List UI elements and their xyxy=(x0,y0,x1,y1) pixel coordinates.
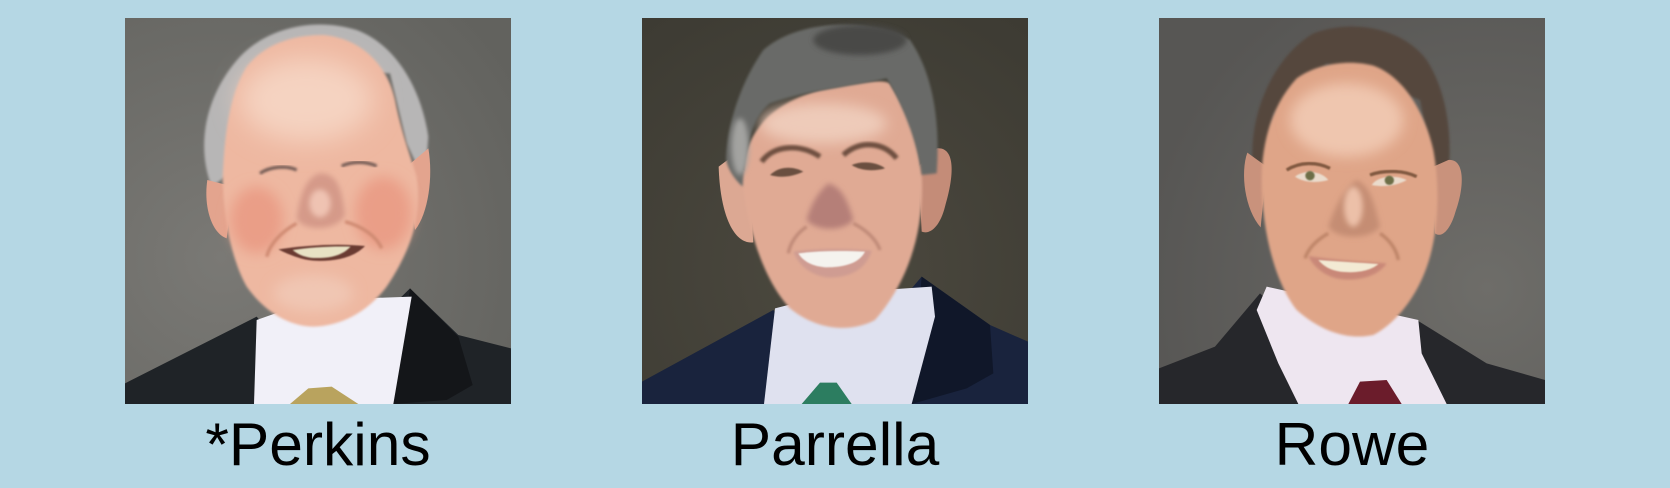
right ear xyxy=(407,148,430,230)
teeth xyxy=(798,251,865,267)
left iris xyxy=(1305,171,1315,180)
face xyxy=(743,81,922,328)
face xyxy=(223,35,418,327)
right ear xyxy=(918,148,952,232)
left eye xyxy=(260,167,297,173)
photo: Perkins portrait xyxy=(125,18,511,404)
left eyebrow xyxy=(1287,164,1330,170)
mouth lips xyxy=(793,249,872,277)
maroon tie xyxy=(1348,380,1402,404)
face xyxy=(1262,63,1437,337)
forehead highlight xyxy=(760,103,887,143)
nose highlight xyxy=(1344,187,1363,227)
nose shadow xyxy=(807,183,853,229)
left ear xyxy=(1244,153,1267,227)
right cheek xyxy=(355,177,412,250)
gold tie xyxy=(290,387,358,404)
right eyebrow xyxy=(1370,171,1417,177)
left ear xyxy=(719,159,753,242)
suit lapel shade xyxy=(393,288,473,404)
panel: Perkins portrait and name xyxy=(125,18,511,478)
name: Rowe: Rowe xyxy=(1275,410,1429,478)
right eyebrow xyxy=(843,145,897,158)
grey hair xyxy=(726,25,938,187)
left ear xyxy=(206,180,233,238)
photo: Parrella portrait xyxy=(642,18,1028,404)
photo: Rowe portrait xyxy=(1159,18,1545,404)
white shirt collar xyxy=(254,297,412,404)
right ear xyxy=(1433,160,1462,235)
green tie xyxy=(802,383,852,404)
left eye xyxy=(770,168,803,177)
photo background xyxy=(1159,18,1545,404)
smile folds xyxy=(267,222,382,257)
smile folds xyxy=(788,223,880,253)
forehead highlight xyxy=(240,58,373,142)
name: Parrella: Parrella xyxy=(731,410,939,478)
right eye xyxy=(342,162,377,166)
teeth xyxy=(293,246,351,258)
navy suit xyxy=(642,277,1028,404)
left cheek xyxy=(230,187,283,253)
right eye xyxy=(852,162,885,170)
nose shadow xyxy=(297,173,345,228)
panel: Rowe portrait and name xyxy=(1159,18,1545,478)
photo background xyxy=(125,18,511,404)
nose highlight xyxy=(309,189,331,217)
mouth lips xyxy=(1308,256,1387,280)
forehead highlight xyxy=(1290,83,1403,157)
white shirt collar xyxy=(764,287,935,404)
suit lapel shade xyxy=(912,277,993,404)
hair shadow on top xyxy=(813,25,907,55)
nose shadow xyxy=(1328,180,1380,237)
left eye xyxy=(1295,172,1328,182)
right iris xyxy=(1385,176,1394,185)
smile folds xyxy=(1305,233,1398,260)
dark suit xyxy=(1159,293,1545,404)
photo background xyxy=(642,18,1028,404)
white shirt collar xyxy=(1257,287,1447,404)
dark brown hair xyxy=(1252,26,1450,180)
chin highlight xyxy=(273,275,353,312)
left eyebrow xyxy=(762,148,820,162)
dark suit xyxy=(125,288,511,404)
hair highlight at temple xyxy=(731,118,749,175)
mouth xyxy=(278,245,365,261)
name: *Perkins: *Perkins xyxy=(205,410,431,478)
teeth xyxy=(1318,260,1378,272)
right eye xyxy=(1372,177,1407,186)
panel: Parrella portrait and name xyxy=(642,18,1028,478)
silver hair xyxy=(204,24,428,187)
